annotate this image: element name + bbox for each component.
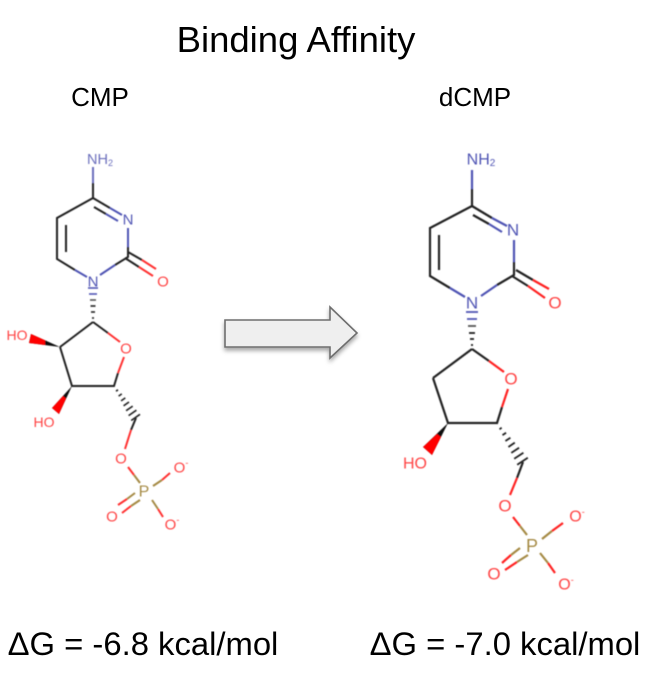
hash bonds CMP bbox=[88, 288, 140, 420]
atoms CMP: NH bbox=[87, 152, 108, 168]
binding energy: dCMP: ΔG = -7.0 kcal/mol bbox=[370, 625, 640, 662]
atoms dCMP: O bbox=[569, 508, 582, 526]
atoms dCMP: 2 bbox=[490, 158, 496, 168]
atoms CMP: P bbox=[139, 484, 149, 500]
atoms CMP: 2 bbox=[108, 158, 113, 168]
atoms CMP: O bbox=[120, 340, 132, 358]
molecule: dCMP structure bbox=[403, 152, 585, 594]
wedge dCMP bbox=[423, 423, 448, 455]
atoms dCMP: O bbox=[504, 370, 518, 388]
atoms dCMP: O bbox=[498, 496, 512, 516]
label: dCMP: dCMP bbox=[439, 82, 511, 112]
molecule: CMP structure bbox=[6, 152, 188, 534]
atoms CMP bbox=[6, 152, 188, 534]
atoms CMP: - bbox=[176, 515, 179, 525]
title: Binding Affinity bbox=[177, 19, 416, 60]
atoms dCMP: O bbox=[548, 294, 562, 312]
atoms dCMP: NH bbox=[467, 152, 490, 168]
atoms CMP: O bbox=[165, 516, 176, 534]
arrow bbox=[225, 307, 357, 358]
atoms CMP: N bbox=[88, 274, 98, 290]
atoms dCMP: N bbox=[466, 294, 478, 312]
atoms CMP: HO bbox=[6, 327, 28, 343]
atoms dCMP: - bbox=[571, 575, 574, 585]
atoms dCMP: P bbox=[526, 536, 538, 556]
atoms CMP: O bbox=[106, 508, 118, 526]
atoms dCMP: HO bbox=[403, 456, 427, 472]
binding energy: CMP: ΔG = -6.8 kcal/mol bbox=[8, 625, 278, 662]
atoms CMP: O bbox=[115, 450, 127, 468]
atoms CMP: N bbox=[123, 212, 133, 228]
wedges CMP bbox=[29, 334, 72, 414]
label: CMP: CMP bbox=[71, 82, 129, 112]
atoms dCMP bbox=[403, 152, 585, 594]
atoms CMP: O bbox=[157, 274, 169, 290]
atoms dCMP: - bbox=[582, 507, 585, 517]
atoms dCMP: O bbox=[487, 564, 501, 584]
hash bonds dCMP bbox=[466, 312, 528, 465]
atoms CMP: - bbox=[185, 458, 188, 468]
atoms dCMP: N bbox=[507, 220, 519, 240]
atoms dCMP: O bbox=[558, 576, 571, 594]
atoms CMP: O bbox=[174, 460, 185, 476]
atoms CMP: HO bbox=[34, 414, 55, 430]
